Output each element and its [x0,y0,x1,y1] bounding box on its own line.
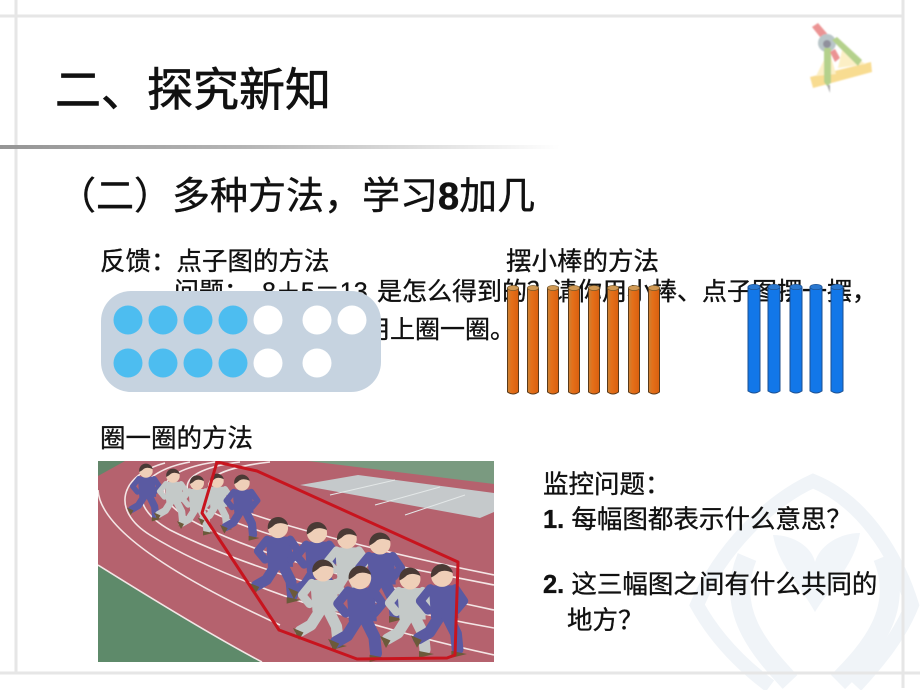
label: dot diagram method: 反馈：点子图的方法 [100,248,330,276]
runners [127,464,161,521]
blue sticks [748,284,844,394]
question 1: 1. 每幅图都表示什么意思？ [543,506,852,534]
hidden question line 2: 用上圈一圈。 [365,316,515,344]
white dots [254,306,366,378]
red selection outline [202,462,458,659]
label: circling method: 圈一圈的方法 [100,425,253,453]
grass [98,461,125,476]
icon: compass and ruler [809,22,873,92]
illustration: children running on track [98,461,494,662]
hidden question line 1 [174,278,877,306]
text: 是怎么得到的？请你用小棒、点子图摆一摆， [377,278,877,306]
title: 二、探究新知 [55,64,331,116]
question 2 continuation: 地方？ [567,607,644,635]
text: 8＋5＝13 [262,278,368,306]
field patch [300,475,494,518]
orange sticks [507,285,660,394]
hidden question line 1: 问题： [174,278,249,306]
monitoring questions [543,471,877,635]
blue dots [114,306,248,378]
subheading: （二）多种方法，学习8加几 [58,176,535,218]
question 2: 2. 这三幅图之间有什么共同的 [543,571,877,599]
label: stick method: 摆小棒的方法 [506,248,659,276]
question heading: 监控问题： [543,471,671,499]
panel: dot frame [101,291,381,392]
